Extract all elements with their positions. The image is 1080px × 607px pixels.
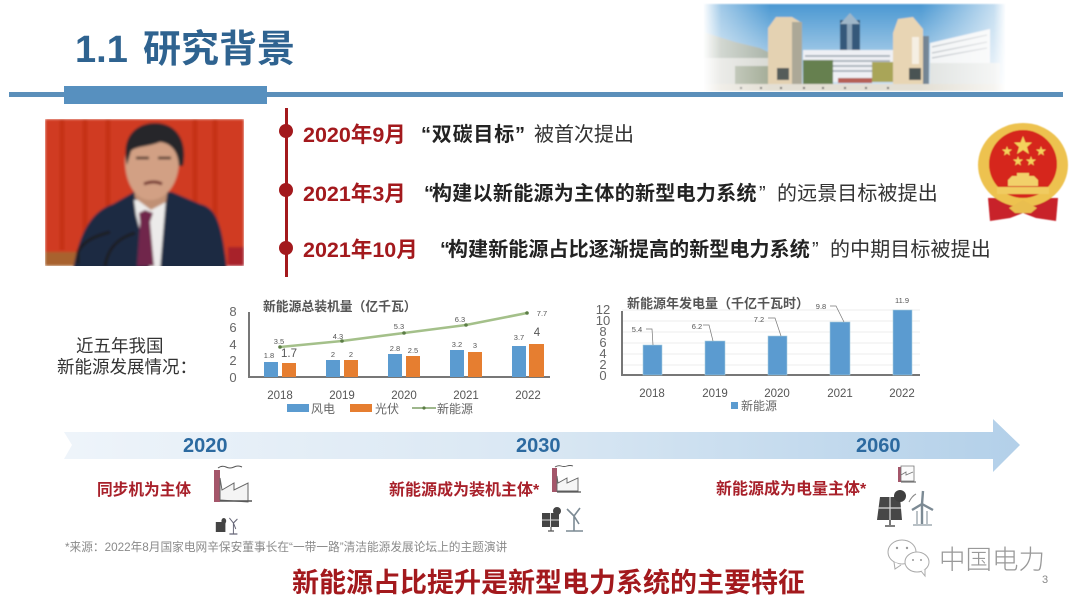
milestone 2021-03: 的远景目标被提出 xyxy=(777,183,938,205)
x axis labels: 2018 xyxy=(267,390,293,402)
icon: renewables large xyxy=(877,490,934,527)
data labels: 2.5 xyxy=(408,346,418,355)
milestone 2021-10: 的中期目标被提出 xyxy=(830,239,991,261)
data labels: 6.3 xyxy=(455,315,465,324)
milestone 2020-09: 2020年9月 xyxy=(303,123,406,147)
milestone 2020-09 xyxy=(303,123,634,147)
data labels: 4.3 xyxy=(333,332,343,341)
y axis labels: 2 xyxy=(229,353,237,368)
side label xyxy=(57,336,197,377)
milestone 2021-03: 构建以新能源为主体的新型电力系统 xyxy=(432,183,757,205)
solar bars xyxy=(282,344,544,377)
milestone 2021-10: 构建新能源占比逐渐提高的新型电力系统 xyxy=(448,239,810,261)
title: 1.1 xyxy=(75,29,128,71)
data labels: 3.5 xyxy=(274,337,284,346)
stage label 2020: 同步机为主体 xyxy=(97,482,191,499)
y axis labels xyxy=(229,304,237,385)
data labels: 2 xyxy=(331,350,335,359)
milestone 2021-03: “ xyxy=(424,183,434,205)
x axis labels: 2022 xyxy=(889,388,915,400)
side label: 新能源发展情况： xyxy=(57,357,197,377)
timeline marker 2020 xyxy=(279,124,293,138)
y axis labels: 8 xyxy=(229,304,237,319)
icon: factory large xyxy=(214,466,252,502)
chart: annual generation xyxy=(596,296,920,413)
national emblem xyxy=(977,122,1069,222)
y axis labels xyxy=(596,302,610,383)
progress arrow xyxy=(64,419,1020,472)
icon: renewables medium xyxy=(542,507,583,532)
y axis labels: 6 xyxy=(599,335,607,350)
legend: 新能源 xyxy=(437,401,473,416)
chart title: 新能源总装机量（亿千瓦） xyxy=(263,299,417,314)
data labels: 7.2 xyxy=(754,315,764,324)
header accent block xyxy=(64,86,267,104)
milestone 2020-09: “双碳目标” xyxy=(421,124,526,146)
campus photo banner xyxy=(704,3,1004,92)
legend: 风电 xyxy=(311,402,335,416)
leader lines xyxy=(646,306,844,345)
y axis labels: 8 xyxy=(599,324,607,339)
data labels: 9.8 xyxy=(816,302,826,311)
page number: 3 xyxy=(1042,574,1048,586)
milestone 2021-10 xyxy=(303,238,991,262)
data labels: 3.7 xyxy=(514,333,524,342)
icon: factory small xyxy=(898,466,916,482)
milestone 2021-10: 2021年10月 xyxy=(303,238,418,262)
y axis labels: 0 xyxy=(229,370,237,385)
timeline marker 2021-10 xyxy=(279,241,293,255)
x axis labels: 2019 xyxy=(702,388,728,400)
speaker photo xyxy=(45,119,244,266)
side label: 近五年我国 xyxy=(76,336,164,356)
year 2020: 2020 xyxy=(183,435,228,457)
y axis labels: 4 xyxy=(599,346,607,361)
data labels: 6.2 xyxy=(692,322,702,331)
x axis labels xyxy=(267,390,541,402)
icon: wechat xyxy=(888,540,930,578)
y axis labels: 4 xyxy=(229,337,237,352)
x axis labels: 2022 xyxy=(515,390,541,402)
title xyxy=(75,29,295,71)
y axis labels: 2 xyxy=(599,357,607,372)
milestone 2021-03: ” xyxy=(759,183,766,205)
data labels: 5.3 xyxy=(394,322,404,331)
stage label 2060: 新能源成为电量主体* xyxy=(716,481,866,498)
data labels: 2.8 xyxy=(390,344,400,353)
y axis labels: 0 xyxy=(599,368,607,383)
x axis labels: 2021 xyxy=(453,390,479,402)
x axis labels: 2018 xyxy=(639,388,665,400)
axes xyxy=(249,312,550,377)
legend: 光伏 xyxy=(375,402,399,416)
year 2030: 2030 xyxy=(516,435,560,457)
chart title: 新能源年发电量（千亿千瓦时） xyxy=(627,296,809,311)
data labels: 1.8 xyxy=(264,351,274,360)
icon: renewables small xyxy=(216,518,238,535)
data labels xyxy=(632,296,909,334)
source note: *来源：2022年8月国家电网辛保安董事长在“一带一路”清洁能源发展论坛上的主题演讲 xyxy=(65,541,507,554)
milestone 2021-03: 2021年3月 xyxy=(303,182,406,206)
x axis labels: 2019 xyxy=(329,390,355,402)
timeline rail xyxy=(285,108,288,277)
legend: 新能源 xyxy=(741,398,777,413)
data labels: 2 xyxy=(349,350,353,359)
milestone 2021-03 xyxy=(303,182,938,206)
y axis labels: 10 xyxy=(596,313,610,328)
generation bars xyxy=(643,310,912,375)
stage label 2030: 新能源成为装机主体* xyxy=(389,482,539,499)
x axis labels: 2021 xyxy=(827,388,853,400)
milestone 2020-09: 被首次提出 xyxy=(534,124,634,146)
new energy line xyxy=(278,311,529,349)
chart: installed capacity xyxy=(229,299,550,416)
data labels: 1.7 xyxy=(281,348,297,360)
takeaway headline: 新能源占比提升是新型电力系统的主要特征 xyxy=(292,568,805,598)
timeline marker 2021-03 xyxy=(279,183,293,197)
watermark: 中国电力 xyxy=(939,545,1045,575)
y axis labels: 12 xyxy=(596,302,610,317)
data labels: 3 xyxy=(473,341,477,350)
data labels: 5.4 xyxy=(632,325,642,334)
header rule xyxy=(9,92,1063,97)
data labels: 4 xyxy=(534,327,541,339)
x axis labels: 2020 xyxy=(764,388,790,400)
wind bars xyxy=(264,346,526,377)
data labels: 11.9 xyxy=(895,296,909,305)
y axis labels: 6 xyxy=(229,320,237,335)
data labels xyxy=(264,309,547,360)
data labels: 7.7 xyxy=(537,309,547,318)
title: 研究背景 xyxy=(143,29,295,71)
milestone 2021-10: “ xyxy=(440,239,450,261)
milestone 2021-10: ” xyxy=(812,239,819,261)
x axis labels: 2020 xyxy=(391,390,417,402)
year 2060: 2060 xyxy=(856,435,900,457)
axes xyxy=(622,311,920,375)
legend xyxy=(287,401,473,416)
x axis labels xyxy=(639,388,915,400)
data labels: 3.2 xyxy=(452,340,462,349)
icon: factory medium xyxy=(552,465,581,493)
